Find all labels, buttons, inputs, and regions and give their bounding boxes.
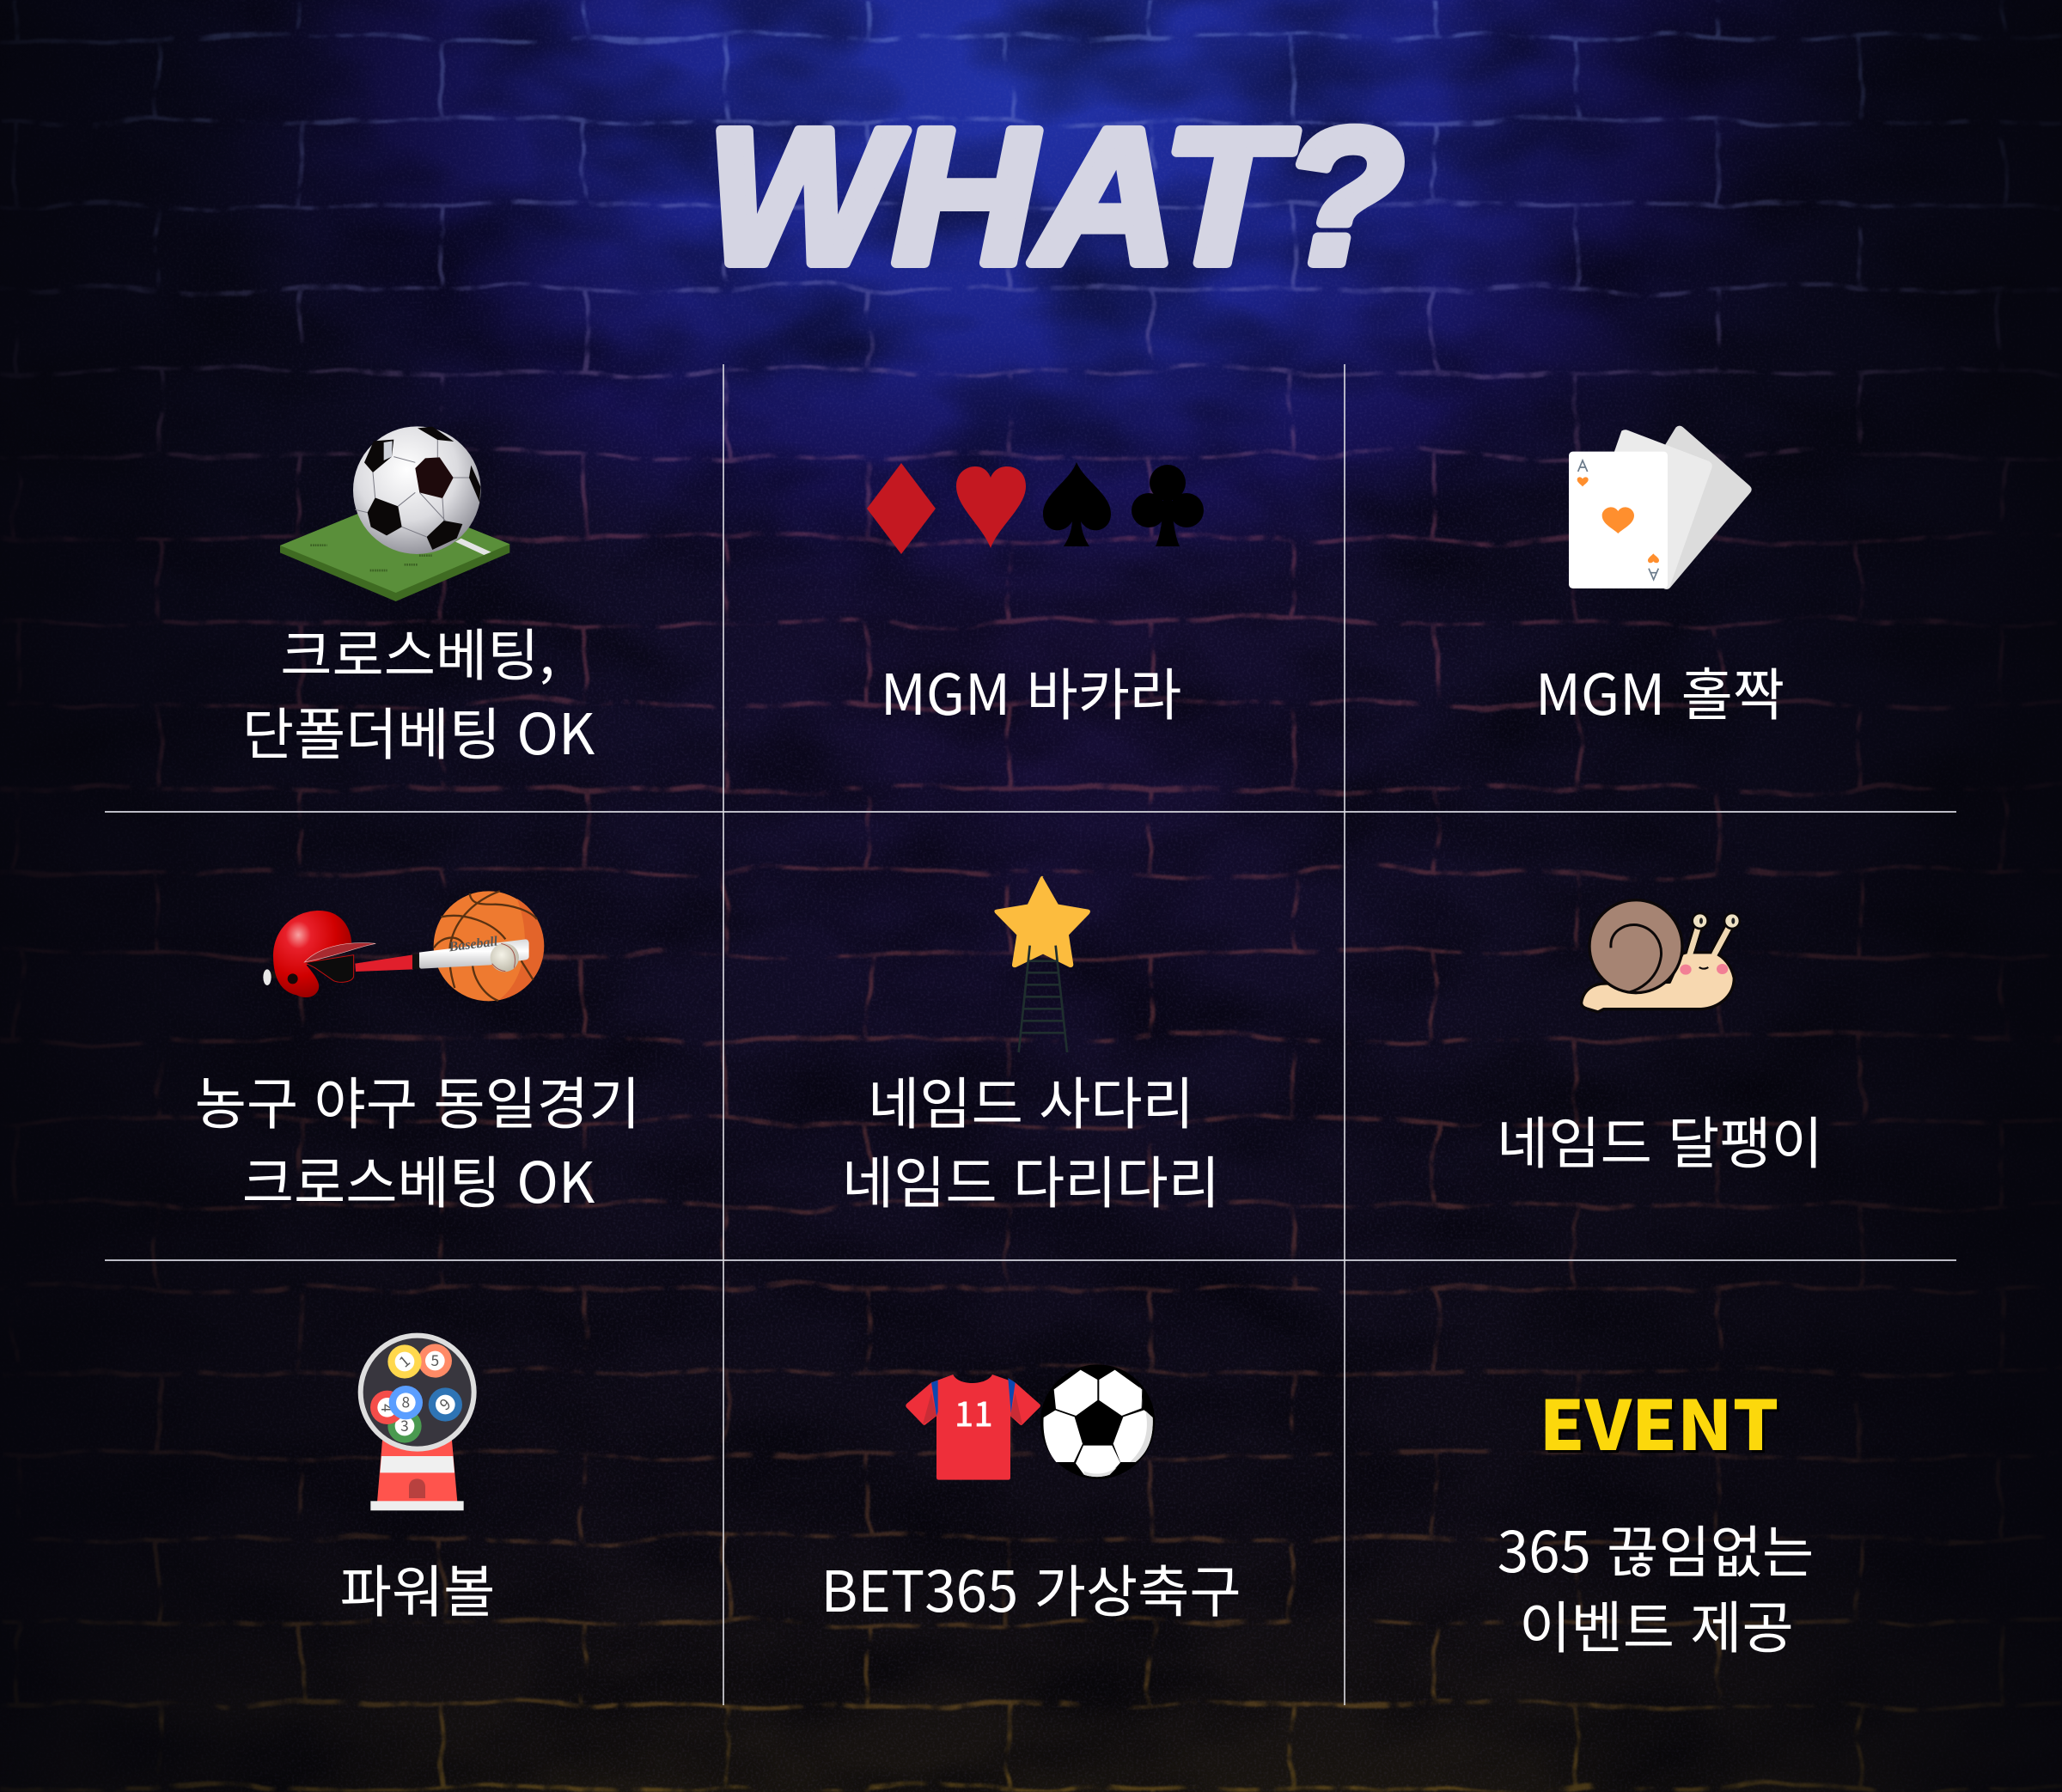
panel: 365 event (1345, 1260, 1956, 1705)
panel: Named ladder: 네임드 사다리 (868, 1058, 1194, 1140)
icon: playing cards (1569, 426, 1752, 589)
icon: red jersey number 11 (906, 1374, 1040, 1480)
panel: Powerball (105, 1260, 723, 1705)
panel: Powerball: 파워볼 (340, 1546, 495, 1628)
panel: Named snail: 네임드 달팽이 (1497, 1098, 1823, 1179)
panel: cross betting: 크로스베팅, (280, 610, 555, 692)
icon: snail (1582, 900, 1740, 1012)
icon: red jersey number 11: 11 (955, 1388, 993, 1437)
icon: helmet, bat and basketball: Baseball (448, 934, 499, 954)
panel: cross betting (105, 364, 723, 812)
panel: same-game cross betting (105, 812, 723, 1260)
panel: same-game cross betting: 크로스베팅 OK (242, 1137, 595, 1219)
panel: Named snail (1345, 812, 1956, 1260)
icon: gumball lottery machine (361, 1336, 474, 1510)
icon: gumball lottery machine: 8 (402, 1391, 410, 1412)
heading: EVENT: EVENT (1540, 1371, 1778, 1471)
panel: 365 event: 365 끊임없는 (1498, 1507, 1814, 1588)
icon: star and ladder (994, 876, 1090, 1052)
icon: soccer ball (1040, 1364, 1155, 1479)
icon: gumball lottery machine: 4 (377, 1404, 399, 1412)
panel: MGM baccarat (723, 364, 1345, 812)
panel: MGM hi-lo (1345, 364, 1956, 812)
panel: 365 event: 이벤트 제공 (1519, 1582, 1794, 1664)
panel: Named ladder (723, 812, 1345, 1260)
icon: soccer ball on turf (280, 426, 509, 601)
panel: BET365 virtual soccer (723, 1260, 1345, 1705)
icon: gumball lottery machine: 3 (400, 1414, 409, 1435)
icon: gumball lottery machine: 9 (435, 1393, 454, 1415)
icon: helmet, bat and basketball (263, 891, 544, 1001)
icon: gumball lottery machine: 5 (431, 1349, 439, 1370)
panel: same-game cross betting: 농구 야구 동일경기 (195, 1058, 640, 1140)
icon: card suits (867, 462, 1204, 554)
panel: cross betting: 단폴더베팅 OK (242, 689, 595, 771)
panel: Named ladder: 네임드 다리다리 (842, 1137, 1220, 1219)
panel: BET365 virtual soccer: BET365 가상축구 (821, 1546, 1241, 1628)
panel: MGM baccarat: MGM 바카라 (881, 649, 1181, 731)
icon: gumball lottery machine: 1 (393, 1350, 414, 1372)
title: WHAT? (706, 89, 1404, 304)
panel: MGM hi-lo: MGM 홀짝 (1535, 649, 1784, 731)
